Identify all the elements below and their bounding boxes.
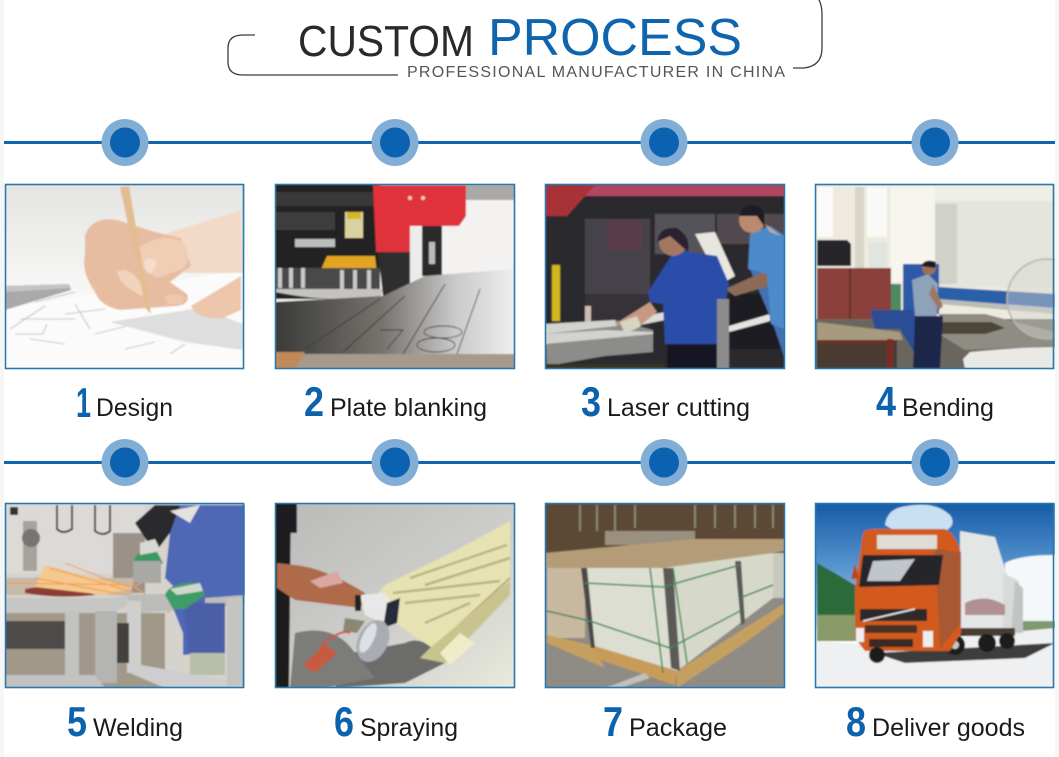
photo frame xyxy=(816,184,1054,368)
step label: Deliver goods xyxy=(872,714,1025,742)
step number 1: 1 xyxy=(76,379,91,426)
photo frame xyxy=(6,504,244,688)
step label: Laser cutting xyxy=(607,394,750,422)
step label: Welding xyxy=(93,714,183,742)
title block xyxy=(228,0,822,81)
panel: step 5 welding xyxy=(5,503,245,745)
timeline 1 xyxy=(4,119,1055,166)
step number 8: 8 xyxy=(846,698,866,745)
step number 7: 7 xyxy=(603,698,623,745)
panel: step 2 plate blanking xyxy=(275,184,515,425)
panel: step 1 design xyxy=(5,184,245,426)
panel: step 4 bending xyxy=(815,184,1059,425)
photo: hand drawing on blueprint xyxy=(6,184,245,355)
timeline 2 xyxy=(4,439,1055,486)
photo: two workers at laser cutter xyxy=(546,185,784,368)
title bracket frame xyxy=(228,0,822,75)
photo frame xyxy=(546,184,784,368)
panel: step 8 deliver goods xyxy=(815,503,1055,745)
photo frame xyxy=(546,504,784,688)
step number 3: 3 xyxy=(581,378,601,425)
step number 5: 5 xyxy=(67,698,87,745)
step label: Design xyxy=(96,394,173,422)
step label: Package xyxy=(629,714,727,742)
panel: step 6 spraying xyxy=(275,503,515,745)
photo: worker grinding with sparks xyxy=(6,503,245,688)
photo: spray painting a pallet xyxy=(276,504,514,687)
heading: process: PROCESS xyxy=(488,9,742,67)
step label: Plate blanking xyxy=(330,394,487,422)
step number 6: 6 xyxy=(334,698,354,745)
photo frame xyxy=(276,504,514,688)
photo frame xyxy=(6,184,244,368)
heading: custom: CUSTOM xyxy=(298,17,474,66)
step label: Bending xyxy=(902,394,994,422)
step label: Spraying xyxy=(360,714,458,742)
panel: step 3 laser cutting xyxy=(545,184,785,425)
step number 4: 4 xyxy=(876,378,897,425)
photo: strapped sheets on pallet xyxy=(546,504,784,687)
photo: turret punch press xyxy=(276,185,514,368)
photo: worker at press brake xyxy=(816,184,1055,369)
photo: orange truck on road xyxy=(816,503,1055,688)
step number 2: 2 xyxy=(304,378,324,425)
subtitle: PROFESSIONAL MANUFACTURER IN CHINA xyxy=(407,64,785,81)
photo frame xyxy=(276,184,514,368)
panel: step 7 package xyxy=(545,503,785,745)
photo frame xyxy=(816,504,1054,688)
